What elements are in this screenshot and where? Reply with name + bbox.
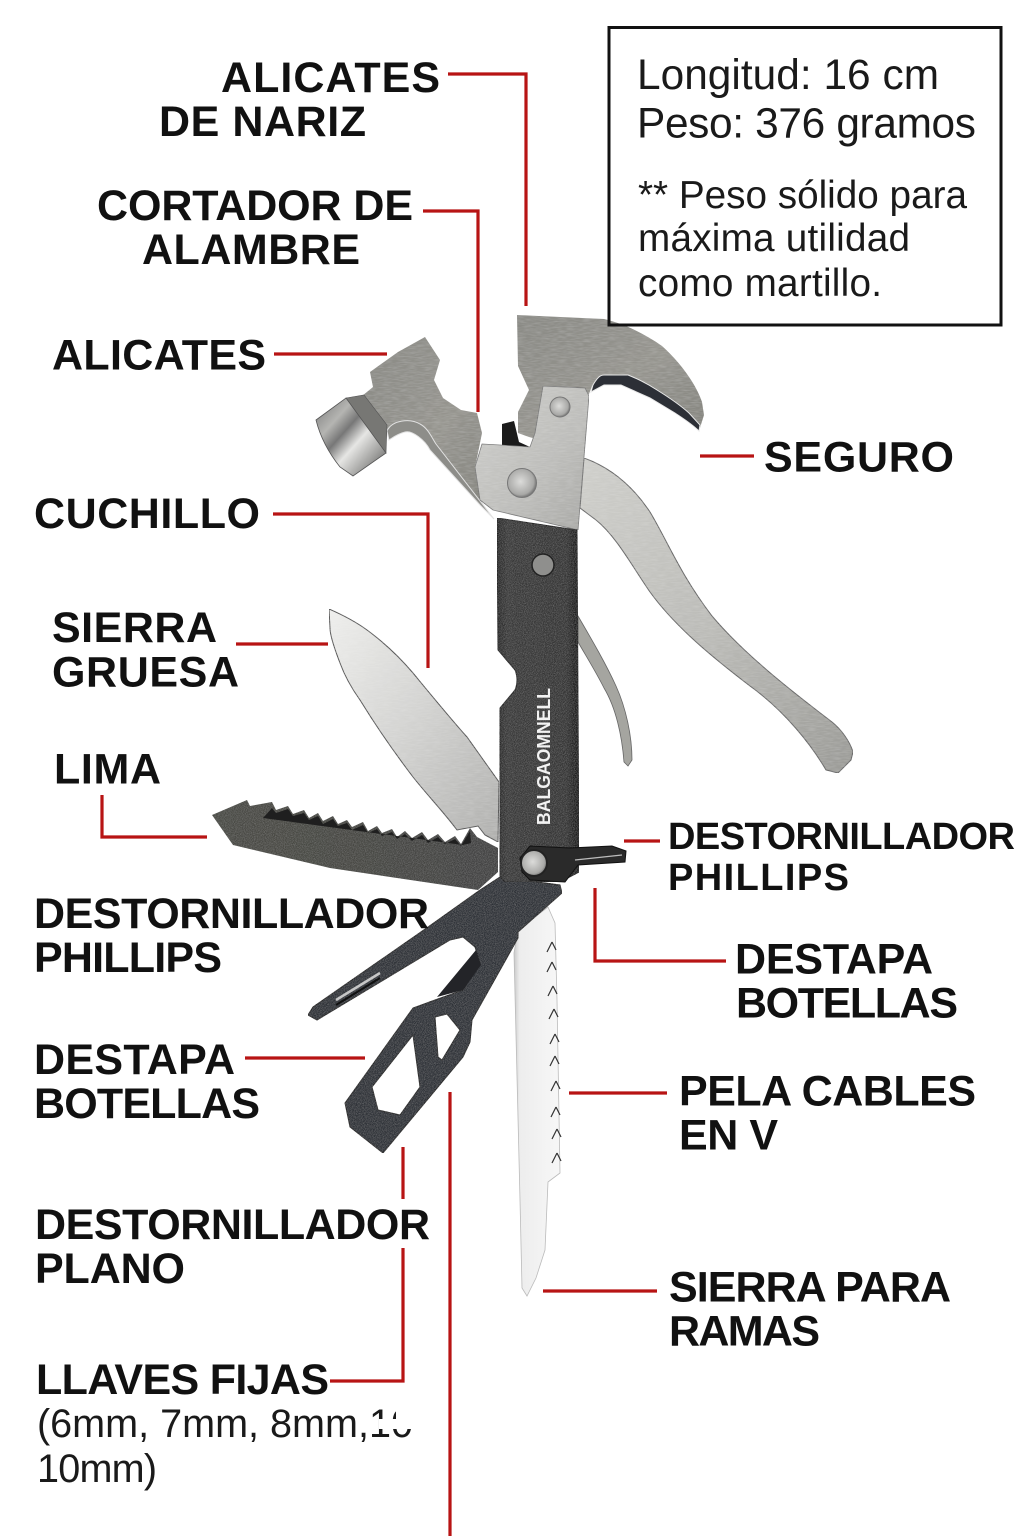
label: lima: LIMA bbox=[54, 746, 161, 794]
label: destapa botellas left: BOTELLAS bbox=[34, 1080, 260, 1128]
label: pela cables en v: PELA CABLES bbox=[679, 1068, 976, 1116]
label: destornillador plano bbox=[35, 1147, 430, 1293]
panel: specifications box bbox=[609, 28, 1001, 325]
tool: hammer neck bevel bbox=[346, 395, 387, 453]
label: pela cables en v bbox=[569, 1068, 976, 1160]
label: sierra para ramas: RAMAS bbox=[669, 1308, 820, 1356]
label: sierra gruesa bbox=[52, 604, 328, 696]
tool: saw blade bbox=[212, 800, 498, 890]
tool: small lever bbox=[578, 616, 632, 766]
handle rivet bbox=[532, 554, 554, 576]
label: destornillador phillips right: DESTORNILLADOR bbox=[668, 816, 1015, 858]
label: alicates de nariz bbox=[159, 54, 526, 306]
tool: plate rivet top bbox=[550, 397, 570, 417]
illustration: multitool bbox=[212, 315, 853, 1296]
label: llaves fijas: (6mm, 7mm, 8mm,10 bbox=[37, 1402, 413, 1446]
label: llaves fijas: 10mm) bbox=[37, 1447, 157, 1491]
tool: small black catch bbox=[502, 421, 530, 447]
label: cortador de alambre: ALAMBRE bbox=[142, 226, 360, 274]
saw: dark channel bbox=[263, 808, 471, 846]
spec: note: ** Peso sólido para bbox=[638, 174, 967, 217]
tool: knife blade bbox=[329, 609, 499, 842]
label: destapa botellas right: DESTAPA bbox=[735, 936, 933, 984]
label: cortador de alambre bbox=[97, 182, 478, 412]
tool: key ring bbox=[520, 846, 626, 882]
tool: plate rivet bottom bbox=[508, 468, 536, 498]
tool: claw dark inner edge bbox=[591, 375, 700, 431]
label: alicates de nariz: DE NARIZ bbox=[159, 98, 366, 146]
label: sierra gruesa: SIERRA bbox=[52, 604, 217, 652]
tool: black handle bbox=[497, 518, 579, 882]
spec: note: como martillo. bbox=[638, 262, 882, 305]
label: pela cables en v: EN V bbox=[679, 1112, 778, 1160]
label: destornillador plano: DESTORNILLADOR bbox=[35, 1201, 430, 1249]
tool: serrated folding saw bbox=[514, 907, 561, 1296]
label: sierra para ramas bbox=[543, 1264, 951, 1356]
slot shadow bbox=[336, 978, 380, 1005]
tool: silver side plate bbox=[475, 386, 589, 530]
label: sierra gruesa: GRUESA bbox=[52, 648, 239, 696]
tool: hammer face cylinder bbox=[316, 398, 386, 476]
label: alicates de nariz: ALICATES bbox=[221, 54, 440, 102]
label: cortador de alambre: CORTADOR DE bbox=[97, 182, 413, 230]
label: seguro: SEGURO bbox=[764, 434, 954, 482]
tool: left pliers head bbox=[362, 337, 494, 519]
label: destornillador phillips right: PHILLIPS bbox=[668, 857, 849, 899]
label: destapa botellas left: DESTAPA bbox=[34, 1036, 235, 1084]
saw teeth marks bbox=[547, 942, 561, 1163]
label: destornillador phillips right bbox=[624, 816, 1015, 899]
spec: note bbox=[638, 174, 967, 305]
tool: left pliers underside edge bbox=[387, 421, 494, 519]
spec: weight: Peso: 376 gramos bbox=[637, 100, 976, 146]
tool: key ring highlight bbox=[575, 855, 622, 860]
screwdriver slot bbox=[336, 973, 380, 1000]
tool: hammer claw head bbox=[517, 315, 704, 440]
label: cuchillo: CUCHILLO bbox=[34, 490, 260, 538]
tool: right pliers handle bbox=[580, 458, 853, 773]
label: destapa botellas left bbox=[34, 1036, 365, 1128]
label: sierra para ramas: SIERRA PARA bbox=[669, 1264, 951, 1312]
label: destornillador phillips left bbox=[34, 890, 429, 982]
tool: lower arm with screwdriver and wrench bbox=[308, 877, 562, 1153]
spec: length: Longitud: 16 cm bbox=[637, 51, 939, 98]
label: destornillador plano: PLANO bbox=[35, 1245, 185, 1293]
spec: note: máxima utilidad bbox=[638, 217, 910, 260]
label: lima bbox=[54, 746, 207, 837]
label: llaves fijas: LLAVES FIJAS bbox=[36, 1356, 329, 1404]
label: cuchillo bbox=[34, 490, 428, 668]
label: alicates: ALICATES bbox=[52, 332, 266, 380]
label: destapa botellas right bbox=[595, 888, 958, 1028]
label: llaves fijas bbox=[36, 1248, 420, 1491]
tool: key ring rivet bbox=[521, 850, 547, 876]
label: destornillador phillips left: DESTORNILLADOR bbox=[34, 890, 429, 938]
wrench inner darker tab bbox=[437, 950, 481, 997]
label: destapa botellas right: BOTELLAS bbox=[736, 980, 958, 1028]
label: destornillador phillips left: PHILLIPS bbox=[34, 934, 222, 982]
callout line: centre drop bbox=[448, 1092, 452, 1536]
brand lettering: BALGAOMNELL bbox=[534, 688, 554, 825]
